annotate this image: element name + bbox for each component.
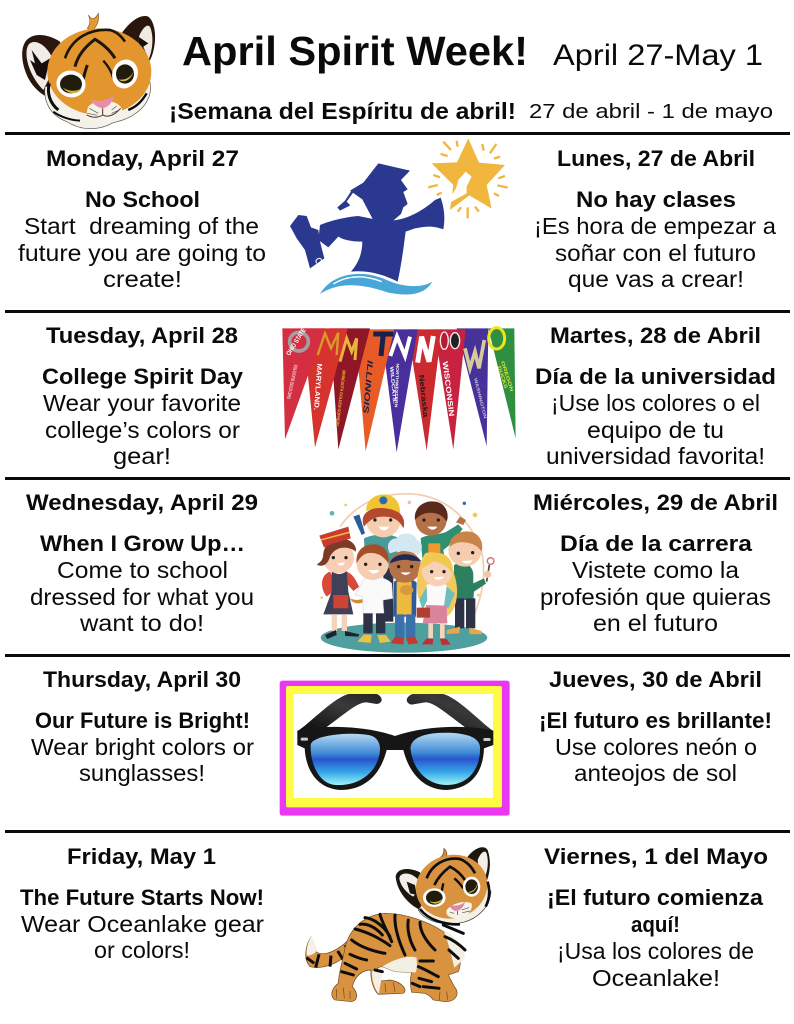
spanish title: ¡Semana del Espíritu de abril! (169, 98, 516, 124)
thursday spanish text: Jueves, 30 de Abril (549, 667, 762, 692)
tuesday spanish text: universidad favorita! (546, 443, 765, 469)
panel: wednesday (26, 490, 778, 653)
tuesday english text: Wear your favorite (43, 390, 241, 416)
wednesday english text (26, 490, 258, 636)
friday english text: or colors! (94, 937, 190, 963)
monday spanish text: Lunes, 27 de Abril (557, 146, 755, 171)
date: April 27-May 1 (553, 39, 763, 72)
wednesday spanish text: Día de la carrera (560, 531, 753, 556)
college pennants: MINNESOTA GOLDEN GOPHERS (335, 370, 347, 427)
monday english text: future you are going to (18, 240, 266, 266)
wednesday spanish text: Miércoles, 29 de Abril (533, 490, 778, 515)
friday spanish text: aquí! (631, 912, 680, 937)
icon: graduate reaching for star (290, 138, 508, 295)
tuesday english text: Tuesday, April 28 (46, 323, 238, 348)
college pennants: WASHINGTON (473, 377, 488, 419)
thursday english text (31, 667, 254, 786)
wednesday spanish text: profesión que quieras (540, 584, 771, 610)
monday spanish text: que vas a crear! (568, 266, 744, 292)
wednesday spanish text (533, 490, 778, 636)
college pennants: DUCKS (497, 365, 509, 389)
thursday english text: Thursday, April 30 (43, 667, 241, 692)
friday spanish text: Viernes, 1 del Mayo (544, 844, 768, 869)
monday english text: Monday, April 27 (46, 146, 239, 171)
monday english text: No School (85, 187, 200, 212)
friday english text: Wear Oceanlake gear (21, 911, 264, 937)
panel: monday (18, 138, 776, 295)
friday spanish text: Oceanlake! (592, 965, 720, 991)
thursday english text: Wear bright colors or (31, 734, 254, 760)
monday spanish text (534, 146, 776, 292)
monday spanish text: No hay clases (576, 187, 736, 212)
college pennants (282, 327, 516, 452)
icon: tiger cub (306, 847, 495, 1002)
tuesday english text (42, 323, 244, 469)
thursday spanish text: Use colores neón o (555, 734, 757, 760)
tuesday english text: college’s colors or (45, 417, 240, 443)
college pennants: OHIO STATE BUCKEYES (286, 364, 300, 400)
monday spanish text: ¡Es hora de empezar a (534, 213, 776, 239)
icon: tiger head mascot (22, 13, 155, 129)
icon: sunglasses in neon frame (280, 681, 510, 816)
college pennants: OHIO STATE (285, 327, 308, 357)
college pennants: ILLINOIS (361, 360, 375, 415)
tuesday spanish text: equipo de tu (587, 417, 724, 443)
college pennants: NORTHWESTERN (394, 363, 400, 408)
tuesday spanish text (535, 323, 776, 469)
monday english text: Start dreaming of the (24, 213, 259, 239)
wednesday english text: When I Grow Up… (40, 531, 245, 556)
friday spanish text (544, 844, 768, 991)
wednesday spanish text: Vistete como la (572, 557, 739, 583)
college pennants: OREGON (500, 360, 515, 393)
panel: tuesday (42, 323, 776, 469)
friday english text (20, 844, 264, 963)
friday english text: Friday, May 1 (67, 844, 216, 869)
wednesday english text: want to do! (79, 610, 204, 636)
wednesday english text: Come to school (57, 557, 228, 583)
wednesday english text: Wednesday, April 29 (26, 490, 258, 515)
thursday spanish text: anteojos de sol (574, 760, 737, 786)
college pennants: WISCONSIN (441, 361, 456, 417)
tuesday english text: College Spirit Day (42, 364, 244, 389)
monday english text: create! (103, 266, 182, 292)
spanish date: 27 de abril - 1 de mayo (529, 101, 773, 123)
college pennants: Nebraska (417, 374, 431, 419)
tuesday spanish text: ¡Use los colores o el (551, 390, 760, 416)
header (22, 13, 773, 129)
monday spanish text: soñar con el futuro (555, 240, 756, 266)
thursday spanish text (539, 667, 772, 786)
thursday english text: sunglasses! (79, 760, 205, 786)
friday english text: The Future Starts Now! (20, 885, 264, 910)
tuesday spanish text: Martes, 28 de Abril (550, 323, 761, 348)
college pennants: WILDCATS. (388, 366, 397, 405)
thursday spanish text: ¡El futuro es brillante! (539, 708, 772, 733)
college pennants: MARYLAND. (312, 363, 322, 410)
tuesday spanish text: Día de la universidad (535, 364, 776, 389)
panel: friday (20, 844, 768, 1002)
title: April Spirit Week! (182, 28, 528, 74)
thursday english text: Our Future is Bright! (35, 708, 250, 733)
illustration: children in career outfits (317, 494, 494, 653)
friday spanish text: ¡El futuro comienza (547, 885, 763, 910)
panel: thursday (31, 667, 772, 816)
wednesday spanish text: en el futuro (593, 610, 718, 636)
monday english text (18, 146, 266, 292)
tuesday english text: gear! (113, 443, 171, 469)
friday spanish text: ¡Usa los colores de (557, 938, 754, 964)
wednesday english text: dressed for what you (30, 584, 254, 610)
